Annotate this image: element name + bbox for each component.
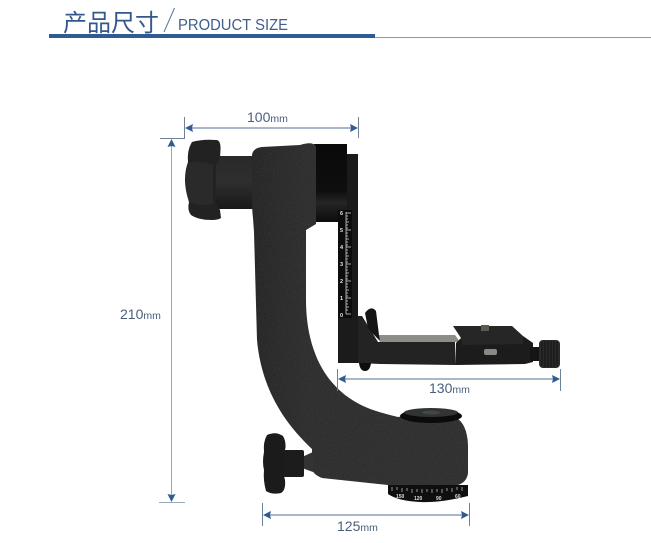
panning base ring: 90 bbox=[436, 496, 442, 502]
dimension: 100mm: 100mm bbox=[247, 109, 288, 125]
scale markings: 4 bbox=[340, 245, 344, 251]
dimension: 130mm: 130mm bbox=[429, 380, 470, 396]
lower knob stem bbox=[283, 450, 304, 477]
scale markings bbox=[338, 210, 352, 319]
L-bracket arm bbox=[358, 316, 455, 365]
clamp knob stem bbox=[530, 347, 540, 361]
title slash bbox=[164, 8, 174, 32]
gimbal arm body bbox=[252, 143, 468, 485]
header rule bbox=[49, 34, 651, 38]
dimension: 210mm: 210mm bbox=[120, 306, 161, 322]
tripod screw bbox=[481, 325, 489, 331]
dimension: 210mm bbox=[120, 138, 185, 502]
title: Chinese: 产品尺寸 bbox=[63, 10, 159, 37]
vertical plate bbox=[338, 154, 358, 363]
scale markings: 3 bbox=[340, 262, 343, 268]
dimension: 125mm bbox=[262, 503, 470, 534]
clamp knob bbox=[539, 340, 560, 368]
panning head cap bbox=[400, 408, 462, 423]
clamp plate bbox=[453, 326, 523, 345]
panning base ring bbox=[388, 485, 468, 502]
top knob shaft bbox=[215, 156, 255, 209]
lower knob bbox=[263, 433, 286, 494]
scale markings: 0 bbox=[340, 313, 343, 319]
top knob bbox=[185, 140, 221, 220]
dimension: 130mm bbox=[338, 369, 560, 396]
lever bbox=[365, 308, 380, 341]
foot bbox=[359, 363, 371, 371]
clamp silver pin bbox=[484, 349, 497, 355]
scale markings: 1 bbox=[340, 296, 343, 302]
scale markings: 6 bbox=[340, 211, 343, 217]
dimension: 100mm bbox=[184, 109, 358, 138]
header bbox=[49, 8, 651, 38]
panning base ring: 60 bbox=[455, 494, 461, 500]
gimbal head product illustration bbox=[185, 140, 560, 502]
arm top highlight bbox=[378, 335, 460, 342]
panning base ring: 120 bbox=[414, 496, 423, 502]
clamp base bbox=[455, 336, 533, 365]
dimension: 125mm: 125mm bbox=[337, 518, 378, 534]
scale markings: 5 bbox=[340, 228, 343, 234]
lower knob joint bbox=[302, 452, 313, 472]
black cylinder bbox=[314, 144, 347, 222]
panning base ring: 150 bbox=[396, 494, 405, 500]
scale markings: 2 bbox=[340, 279, 343, 285]
title: English: PRODUCT SIZE bbox=[178, 17, 288, 34]
